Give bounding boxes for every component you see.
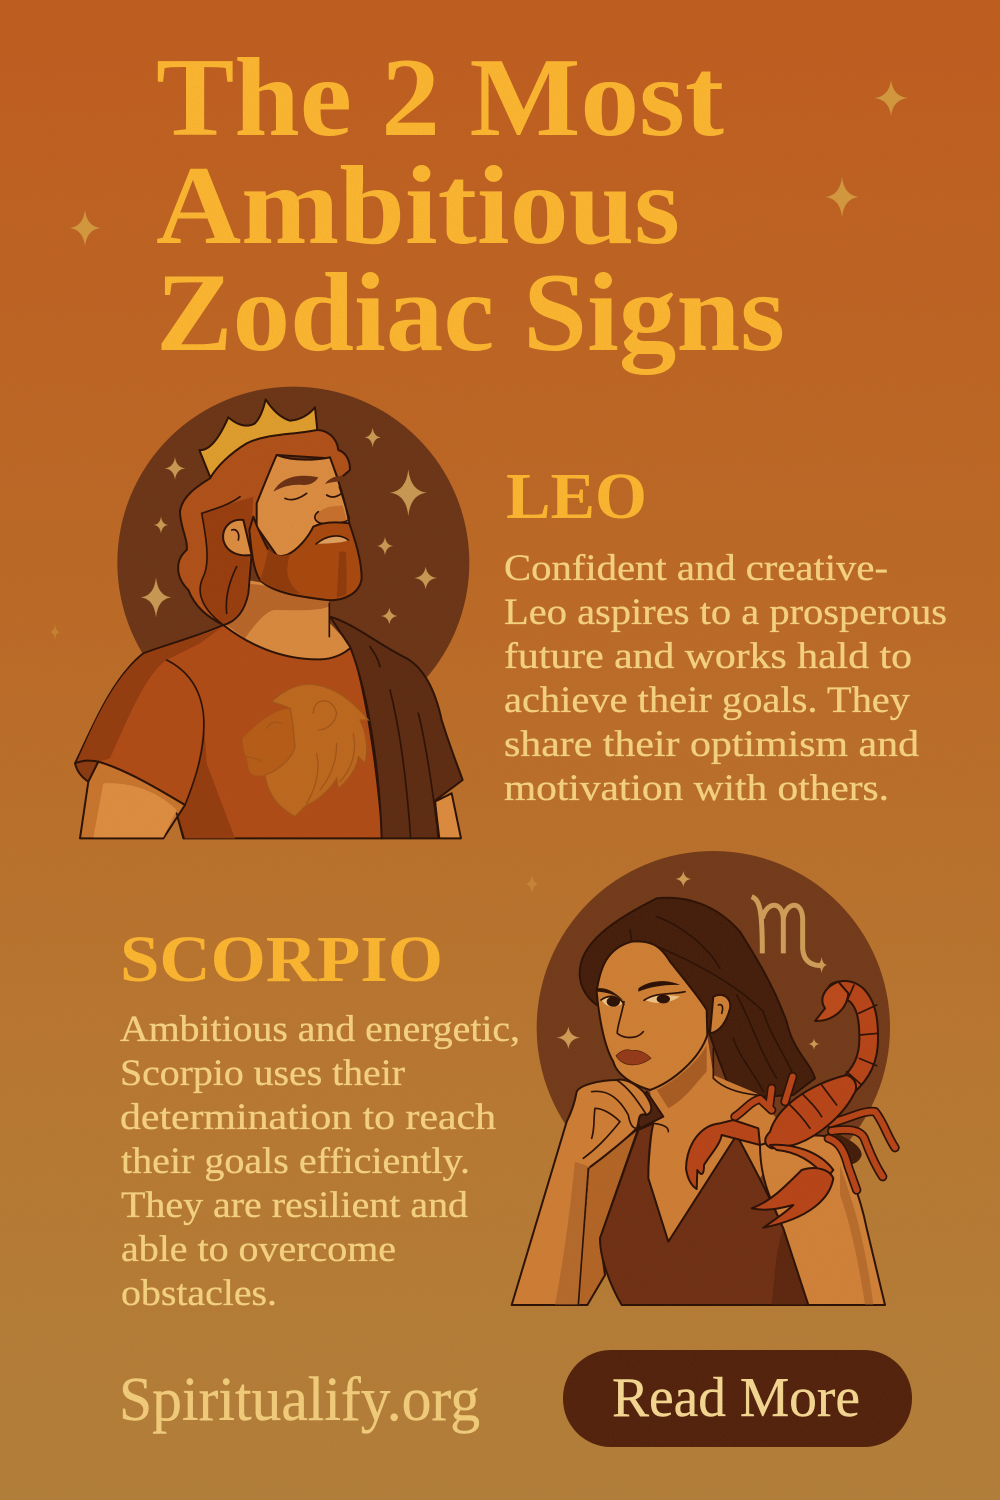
hair bbox=[178, 430, 350, 625]
illustration: Scorpio woman with scorpion bbox=[512, 851, 895, 1305]
legs fill bbox=[735, 1077, 895, 1190]
nose bbox=[316, 505, 347, 523]
right claw arm bbox=[770, 1145, 833, 1178]
Scorpio description: their goals efficiently. bbox=[121, 1141, 470, 1182]
neck line bbox=[327, 603, 332, 637]
dark collar behind hand bbox=[633, 1092, 663, 1128]
shirt bbox=[75, 625, 383, 838]
Scorpio description: obstacles. bbox=[121, 1273, 277, 1314]
cloak bbox=[330, 617, 463, 838]
Leo heading: LEO bbox=[506, 460, 647, 533]
hair strands bbox=[630, 917, 793, 1092]
illustration: Leo man with crown bbox=[75, 387, 469, 838]
Leo description: motivation with others. bbox=[504, 768, 889, 809]
hair strands bbox=[200, 497, 240, 625]
nose bbox=[617, 1002, 643, 1037]
lion emblem bbox=[243, 684, 368, 817]
Scorpio description: able to overcome bbox=[121, 1229, 396, 1270]
Leo description bbox=[504, 548, 947, 809]
halo circle with stars bbox=[117, 387, 469, 739]
Leo description: share their optimism and bbox=[504, 724, 920, 765]
beard bbox=[249, 517, 362, 600]
beard shading bbox=[260, 548, 347, 597]
ear bbox=[710, 995, 730, 1033]
left claw bbox=[686, 1120, 760, 1189]
neck lines bbox=[653, 1048, 757, 1132]
right arm bbox=[435, 793, 461, 838]
crown bbox=[199, 399, 318, 477]
hair behind shoulder bbox=[833, 1132, 862, 1165]
Scorpio description: determination to reach bbox=[120, 1097, 497, 1138]
face bbox=[257, 455, 353, 560]
hair shadow lock bbox=[201, 497, 253, 624]
body segments bbox=[790, 1085, 837, 1128]
cloak folds bbox=[370, 647, 437, 838]
scorpion bbox=[686, 982, 895, 1228]
dress shade bbox=[772, 1228, 808, 1304]
tail segments bbox=[847, 985, 878, 1085]
Scorpio description: Scorpio uses their bbox=[120, 1053, 405, 1094]
eyebrows bbox=[597, 981, 680, 1001]
closed eyes bbox=[285, 493, 342, 500]
ear bbox=[223, 520, 252, 555]
Scorpio description: They are resilient and bbox=[121, 1185, 469, 1226]
Scorpio zodiac glyph bbox=[752, 897, 820, 966]
neck bbox=[223, 580, 352, 660]
title: The 2 Most bbox=[156, 36, 724, 160]
stinger bbox=[815, 982, 848, 1021]
halo circle with stars bbox=[537, 851, 890, 1204]
hair bbox=[580, 898, 815, 1098]
Leo description: Confident and creative- bbox=[504, 548, 888, 589]
shirt shadow bbox=[76, 627, 235, 838]
tail outline bbox=[837, 990, 869, 1087]
legs outline bbox=[735, 1077, 895, 1190]
inner arm line bbox=[177, 813, 184, 838]
sleeve cuff bbox=[75, 761, 98, 782]
neck shadow bbox=[657, 1045, 707, 1108]
left arm and hand bbox=[512, 1080, 651, 1305]
arm shadow bbox=[840, 1165, 873, 1304]
dress bbox=[600, 1123, 808, 1305]
eyes bbox=[602, 995, 680, 1007]
decorative background stars bbox=[50, 80, 908, 894]
mouth bbox=[316, 536, 348, 544]
neck and chest bbox=[648, 1032, 787, 1242]
left arm bbox=[80, 762, 185, 838]
eyebrows bbox=[273, 476, 343, 492]
torso skin beside dress bbox=[578, 1128, 638, 1305]
neck shadow bbox=[227, 583, 329, 638]
Leo description: Leo aspires to a prosperous bbox=[504, 592, 947, 633]
Read More button: Read More bbox=[612, 1367, 860, 1429]
sleeve seam bbox=[167, 660, 204, 805]
Scorpio description bbox=[120, 1009, 520, 1314]
eyelid lines bbox=[601, 992, 685, 1004]
title: Zodiac Signs bbox=[156, 251, 785, 375]
lips bbox=[616, 1050, 651, 1065]
right claw bbox=[752, 1168, 833, 1228]
face bbox=[597, 941, 707, 1090]
arm highlight bbox=[93, 783, 177, 837]
Scorpio description: Ambitious and energetic, bbox=[120, 1009, 520, 1050]
Scorpio heading: SCORPIO bbox=[120, 923, 443, 996]
right shoulder and arm bbox=[760, 1136, 885, 1305]
website footer text: Spiritualify.org bbox=[119, 1366, 480, 1434]
title: Ambitious bbox=[156, 144, 680, 268]
body bbox=[765, 1075, 856, 1148]
Leo description: achieve their goals. They bbox=[504, 680, 911, 721]
tail fill bbox=[837, 990, 869, 1087]
Leo description: future and works hald to bbox=[504, 636, 912, 677]
Read More button bbox=[563, 1350, 912, 1447]
title bbox=[156, 36, 785, 375]
